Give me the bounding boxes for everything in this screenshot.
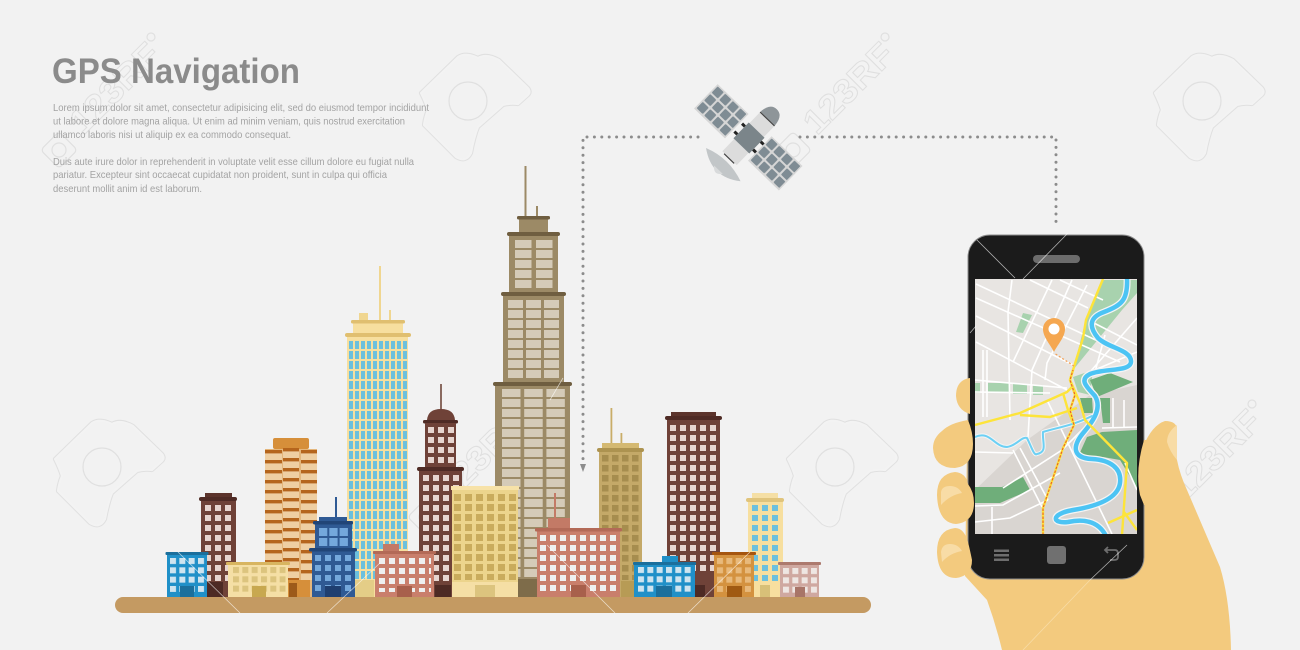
ground: [115, 597, 871, 613]
watermark: logos: 123RF: [62, 36, 168, 142]
building: left blue block: [166, 552, 208, 597]
text block: intro paragraphs: ut labore et dolore magna aliqua. Ut enim ad minim veniam, quis nostrud exercitation: [53, 116, 405, 128]
speaker: [1033, 255, 1080, 263]
city skyline: [115, 166, 871, 613]
building: small salmon block: [373, 544, 436, 597]
building: small pink block: [778, 562, 821, 597]
watermark: logos: 123RF: [1163, 403, 1269, 509]
text block: intro paragraphs: Duis aute irure dolor in reprehenderit in voluptate velit esse cillum dolore eu fugiat nulla: [53, 157, 414, 168]
yellow main roads: [975, 279, 1137, 535]
building: orange striped tower: [265, 438, 317, 597]
watermark: logos: 123RF: [429, 403, 535, 509]
building: small yellow block: [226, 562, 290, 597]
building: yellow mid-rise: [451, 486, 519, 597]
watermark: stamps: [55, 55, 1264, 525]
building: left dark brown tower: [199, 493, 237, 597]
building: tall dark brown tower: [665, 412, 722, 597]
building: small orange block: [712, 552, 756, 597]
icon: map pin: [1043, 318, 1065, 352]
white road network: [975, 280, 1137, 534]
building: large salmon block: [535, 493, 622, 597]
text block: intro paragraphs: pariatur. Excepteur sint occaecat cupidatat non proident, sunt in culpa qui officia: [53, 170, 387, 181]
arrow: signal into city: [580, 464, 586, 472]
watermark: logos: [41, 33, 1269, 535]
river: [975, 278, 1131, 536]
text block: intro paragraphs: ullamco laboris nisi ut aliquip ex ea commodo consequat.: [53, 130, 291, 141]
route to pin: [1054, 353, 1074, 366]
building: cream tower: [746, 493, 784, 597]
left solar panel: [694, 84, 749, 138]
watermark: logos: 123RF: [796, 36, 902, 142]
building: cyan glass tower: [345, 266, 411, 597]
icon: satellite: [672, 68, 819, 213]
dotted signal lines: [583, 137, 1056, 461]
title: GPS Navigation: [52, 52, 300, 91]
icon: home button: [1047, 546, 1066, 564]
watermark: diagonal lines: [178, 233, 1127, 650]
phone: [968, 235, 1144, 579]
route dashed: [1043, 370, 1075, 535]
building: big tan tower: [493, 166, 572, 597]
hand: fingers and thumb: [933, 378, 1177, 578]
building: olive tower: [597, 408, 644, 597]
building: navy tower: [309, 497, 357, 597]
right solar panel: [748, 136, 803, 191]
satellite body: [718, 99, 788, 169]
map screen: [975, 278, 1137, 536]
icon: menu button: [994, 550, 1009, 561]
text block: intro paragraphs: [53, 103, 429, 195]
hand: palm: [965, 380, 1231, 650]
building: mid blue block: [633, 556, 696, 597]
building: domed brown tower: [417, 384, 464, 597]
icon: back button: [1105, 547, 1118, 560]
satellite dish: [698, 145, 744, 189]
text block: intro paragraphs: deserunt mollit anim id est laborum.: [53, 184, 202, 195]
text block: intro paragraphs: Lorem ipsum dolor sit amet, consectetur adipisicing elit, sed do eiusmod tempor incididunt: [53, 103, 429, 114]
